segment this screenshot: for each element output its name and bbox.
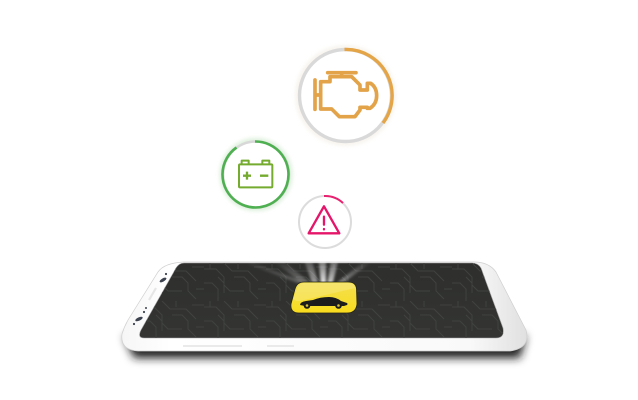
phone front sensors	[133, 273, 167, 325]
app icon	[291, 282, 357, 313]
icon: warning gauge	[299, 196, 351, 248]
light rays	[248, 252, 370, 288]
phone side buttons	[183, 345, 294, 347]
phone screen	[139, 262, 504, 338]
phone body	[122, 262, 527, 351]
icon: battery gauge	[222, 140, 290, 208]
icon: battery symbol	[239, 161, 272, 187]
icon: engine symbol	[315, 73, 377, 117]
icon: warning triangle	[309, 206, 339, 233]
phone shadow	[124, 336, 526, 358]
icon: engine gauge	[298, 48, 394, 144]
icon: car silhouette	[300, 297, 348, 309]
infographic: phone with car diagnostics alerts	[118, 45, 532, 366]
phone	[122, 252, 527, 358]
